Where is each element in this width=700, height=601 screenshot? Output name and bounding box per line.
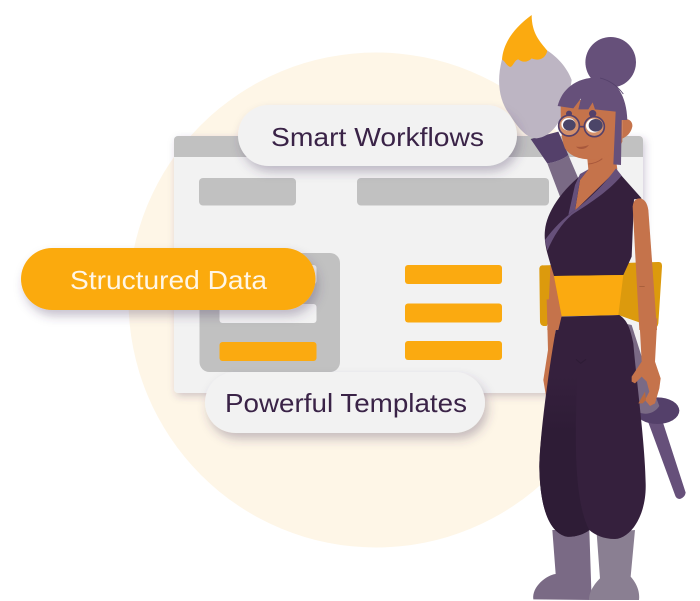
right forearm and hand <box>632 318 661 406</box>
grey header bar left <box>199 178 296 206</box>
window title bar <box>174 136 643 157</box>
pill: Powerful Templates: Powerful Templates <box>225 388 467 418</box>
pill: Smart Workflows: Smart Workflows <box>271 122 484 152</box>
background circle <box>128 52 624 548</box>
app window <box>174 136 643 393</box>
eyebrows <box>566 111 572 117</box>
pill: Structured Data: Structured Data <box>70 265 268 295</box>
ninja character <box>533 37 662 600</box>
orange list bars <box>405 265 502 360</box>
grey header bar right <box>357 178 549 206</box>
gi top <box>545 168 642 276</box>
face <box>561 100 622 159</box>
right boot <box>589 530 639 600</box>
giant paintbrush <box>499 15 578 197</box>
obi sash <box>554 275 623 316</box>
head <box>558 77 632 165</box>
left boot <box>533 530 592 600</box>
obi back panel <box>539 262 662 328</box>
glasses <box>559 115 604 137</box>
grey form card <box>200 253 340 372</box>
sword blade <box>645 413 686 499</box>
pill: Powerful Templates <box>205 372 485 433</box>
ear <box>622 119 632 139</box>
right upper arm <box>633 198 657 330</box>
neck and chest <box>575 152 617 211</box>
trouser fold <box>539 377 589 537</box>
left forearm <box>543 299 559 400</box>
legs <box>533 299 646 600</box>
scabbard and guard <box>624 323 679 424</box>
left upper arm <box>547 263 562 330</box>
collar left band <box>568 169 588 215</box>
collar right band <box>545 168 622 251</box>
torso <box>545 152 657 330</box>
pill: Structured Data <box>21 248 316 310</box>
trousers <box>539 315 646 539</box>
lips <box>576 145 589 149</box>
pill: Smart Workflows <box>238 105 517 166</box>
neck shadow <box>588 159 602 164</box>
hair bun <box>585 37 636 88</box>
hair <box>558 77 627 165</box>
